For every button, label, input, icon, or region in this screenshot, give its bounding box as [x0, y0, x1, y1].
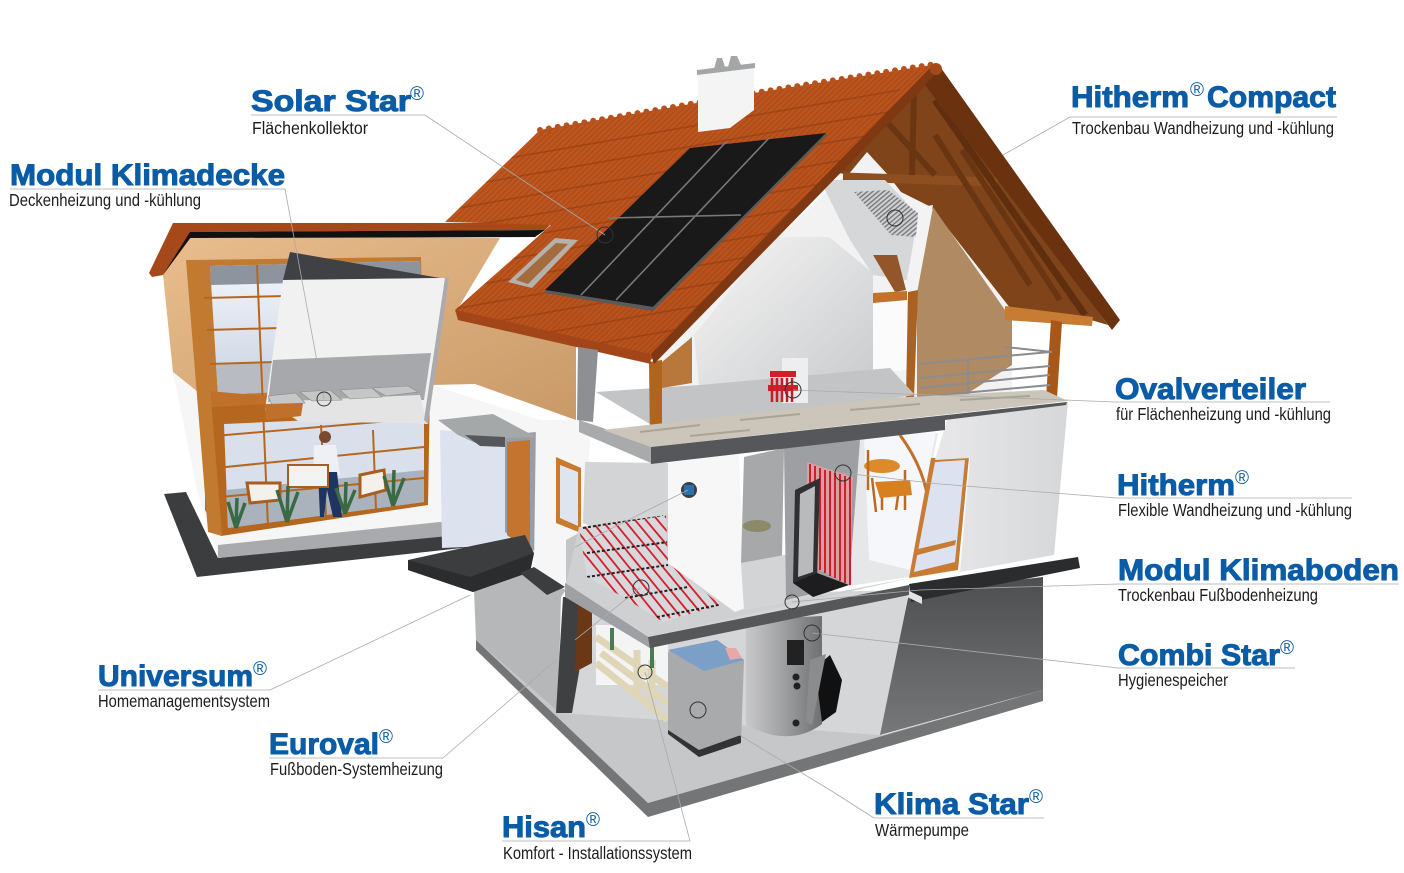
label: Hitherm Compact — [1070, 80, 1337, 138]
wooden gable — [835, 78, 1108, 325]
label: Hitherm — [1117, 468, 1352, 520]
label: Euroval: Fußboden-Systemheizung — [270, 759, 443, 779]
right exterior wall — [935, 402, 1068, 572]
base slab — [164, 492, 480, 577]
window mullions — [204, 265, 424, 527]
large right window — [909, 457, 969, 578]
chimney — [697, 56, 755, 132]
ceiling modules — [268, 386, 418, 405]
label: Hitherm Compact: ® — [1190, 80, 1204, 101]
label: Ovalverteiler: für Flächenheizung und -kühlung — [1116, 404, 1331, 424]
label: Solar Star: ® — [410, 84, 424, 105]
hot water tank — [746, 616, 842, 736]
label: Modul Klimadecke: Modul Klimadecke — [10, 159, 285, 192]
red wall heating — [806, 462, 853, 585]
gable back — [650, 152, 1050, 445]
label: Hisan: Komfort - Installationssystem — [503, 843, 692, 863]
lower window — [205, 385, 430, 536]
person — [313, 431, 342, 517]
label: Solar Star — [251, 84, 425, 138]
label: Universum: Universum — [98, 660, 253, 693]
roof ridge scallops — [540, 64, 935, 130]
left wing of the house — [149, 223, 576, 577]
translucent ceiling panel — [283, 252, 440, 280]
bathroom — [741, 448, 784, 563]
label: Modul Klimaboden: Trockenbau Fußbodenheizung — [1118, 585, 1318, 605]
label: Hitherm Compact: Hitherm — [1071, 81, 1189, 114]
label: Hitherm: Flexible Wandheizung und -kühlung — [1118, 500, 1352, 520]
plants — [228, 470, 404, 528]
outer white wall — [534, 420, 590, 590]
label: Modul Klimadecke — [9, 159, 285, 210]
dark right wall — [880, 577, 1043, 735]
label: Universum: Homemanagementsystem — [98, 691, 270, 711]
label: Euroval — [269, 727, 443, 779]
label: Universum: ® — [253, 659, 267, 680]
label: Combi Star: Combi Star — [1118, 639, 1280, 672]
left exterior wall — [474, 572, 566, 716]
brown door — [575, 605, 592, 672]
label: Hisan: Hisan — [502, 811, 586, 844]
manifold — [768, 358, 808, 403]
floor slab front — [565, 583, 909, 648]
shower cabin — [793, 478, 820, 583]
label: Modul Klimaboden — [1118, 554, 1399, 605]
label: Ovalverteiler: Ovalverteiler — [1115, 373, 1306, 406]
dark corner post — [556, 597, 592, 713]
label: Combi Star: Hygienespeicher — [1118, 670, 1228, 690]
label: Klima Star: ® — [1029, 787, 1043, 808]
attic and gable interior — [596, 78, 1108, 445]
label: Combi Star — [1118, 638, 1295, 690]
ground floor — [474, 572, 1043, 817]
canopy — [438, 414, 536, 445]
red floor heating mat — [580, 515, 720, 622]
cooling ceiling grille — [854, 190, 918, 237]
balcony slab — [577, 347, 1068, 464]
label: Klima Star — [874, 787, 1044, 840]
label: Hitherm: ® — [1235, 468, 1249, 489]
white partition — [668, 453, 745, 612]
first floor surface — [566, 515, 910, 637]
beam and right post — [1005, 306, 1093, 326]
tile rows — [456, 90, 900, 344]
label: Modul Klimadecke: Deckenheizung und -kühlung — [9, 190, 201, 210]
label: Combi Star: ® — [1280, 638, 1294, 659]
entry slab — [408, 535, 534, 592]
interior back wall — [560, 590, 909, 735]
attic floor — [596, 368, 915, 430]
washbasin — [743, 520, 771, 532]
main roof — [420, 63, 1120, 375]
chairs — [247, 470, 386, 503]
icon: roof window — [508, 238, 578, 288]
left room wall — [583, 462, 668, 560]
tan upper wall — [163, 236, 576, 420]
rear window — [873, 255, 906, 292]
dining room view — [864, 432, 936, 570]
label: Solar Star: Solar Star — [251, 85, 411, 118]
label: Euroval: Euroval — [269, 728, 379, 761]
timber post — [649, 360, 662, 444]
tan wall — [917, 207, 1012, 400]
balcony railing — [920, 347, 1052, 407]
label: Modul Klimaboden: Modul Klimaboden — [1118, 554, 1399, 587]
black corner panel — [570, 533, 587, 580]
label: Hitherm Compact: Compact — [1207, 81, 1336, 114]
door frame and door — [505, 432, 536, 552]
entrance glass — [440, 430, 512, 548]
solar panels — [545, 133, 827, 311]
label: Universum — [98, 659, 270, 711]
outer left window — [556, 457, 581, 533]
first floor — [408, 402, 1080, 648]
leader lines and marker circles — [270, 115, 1118, 841]
upper window — [190, 257, 424, 402]
label: Klima Star: Klima Star — [874, 788, 1029, 821]
floor edge — [476, 640, 1043, 817]
label: Klima Star: Wärmepumpe — [875, 820, 969, 840]
label: Hisan — [502, 810, 692, 863]
label: Euroval: ® — [379, 727, 393, 748]
heat pump box — [668, 640, 744, 757]
label: Solar Star: Flächenkollektor — [252, 118, 368, 138]
label: Hisan: ® — [586, 810, 600, 831]
label: Hitherm: Hitherm — [1117, 469, 1235, 502]
label: Ovalverteiler — [1115, 373, 1331, 424]
pipes — [596, 625, 668, 720]
outer wall white — [173, 372, 540, 560]
floor — [476, 640, 1043, 803]
interior gray walls — [694, 237, 873, 395]
blue wall thermostat — [681, 482, 697, 498]
dark ledge — [909, 557, 1080, 602]
label: Hitherm Compact: Trockenbau Wandheizung und -kühlung — [1072, 118, 1334, 138]
roof eave edges — [456, 310, 651, 364]
roof of left wing — [149, 223, 552, 277]
rear room wall — [784, 440, 865, 600]
